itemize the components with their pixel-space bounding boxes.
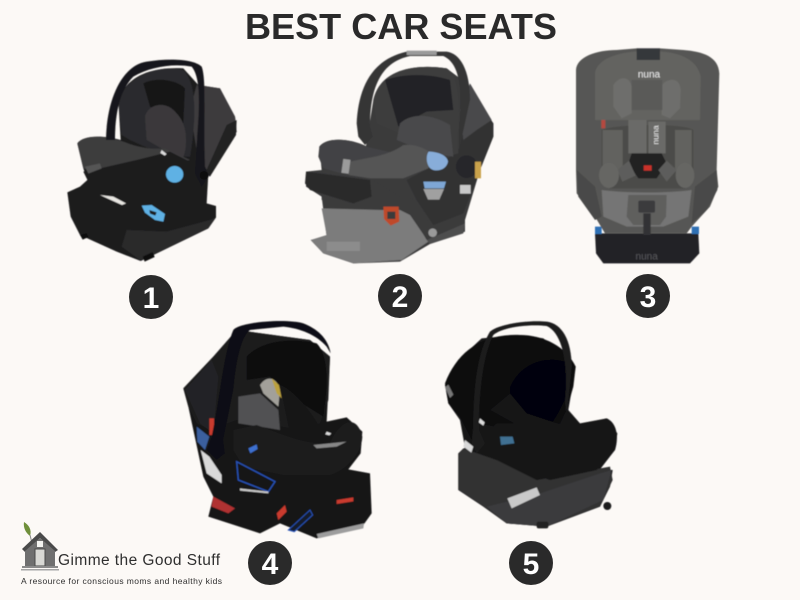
- car seat 3: nuna: [638, 70, 661, 81]
- title: BEST CAR SEATS: [245, 6, 557, 47]
- number badge 2: [378, 274, 422, 318]
- logo: Gimme the Good Stuff: Gimme the Good Stuff: [58, 552, 221, 569]
- car seat 5: [445, 321, 617, 528]
- number badge 5: [509, 541, 553, 585]
- number badge 4: 4: [262, 548, 279, 581]
- number badge 1: [129, 275, 173, 319]
- car seat 4: [183, 321, 372, 538]
- number badge 1: 1: [143, 282, 159, 315]
- number badge 3: [626, 274, 670, 318]
- car seat 1: [67, 60, 237, 262]
- number badge 2: 2: [392, 281, 408, 314]
- number badge 4: [248, 541, 292, 585]
- number badge 5: 5: [523, 548, 539, 581]
- logo: Gimme the Good Stuff: [21, 522, 222, 586]
- car seat 3: [576, 48, 719, 263]
- car seat 3: nuna: [636, 251, 658, 262]
- logo: Gimme the Good Stuff: A resource for conscious moms and healthy kids: [21, 576, 222, 586]
- car seat 2: [305, 51, 493, 263]
- car seat 3: nuna: [651, 125, 661, 145]
- number badge 3: 3: [640, 281, 656, 314]
- icon: house with leaf: [21, 522, 59, 570]
